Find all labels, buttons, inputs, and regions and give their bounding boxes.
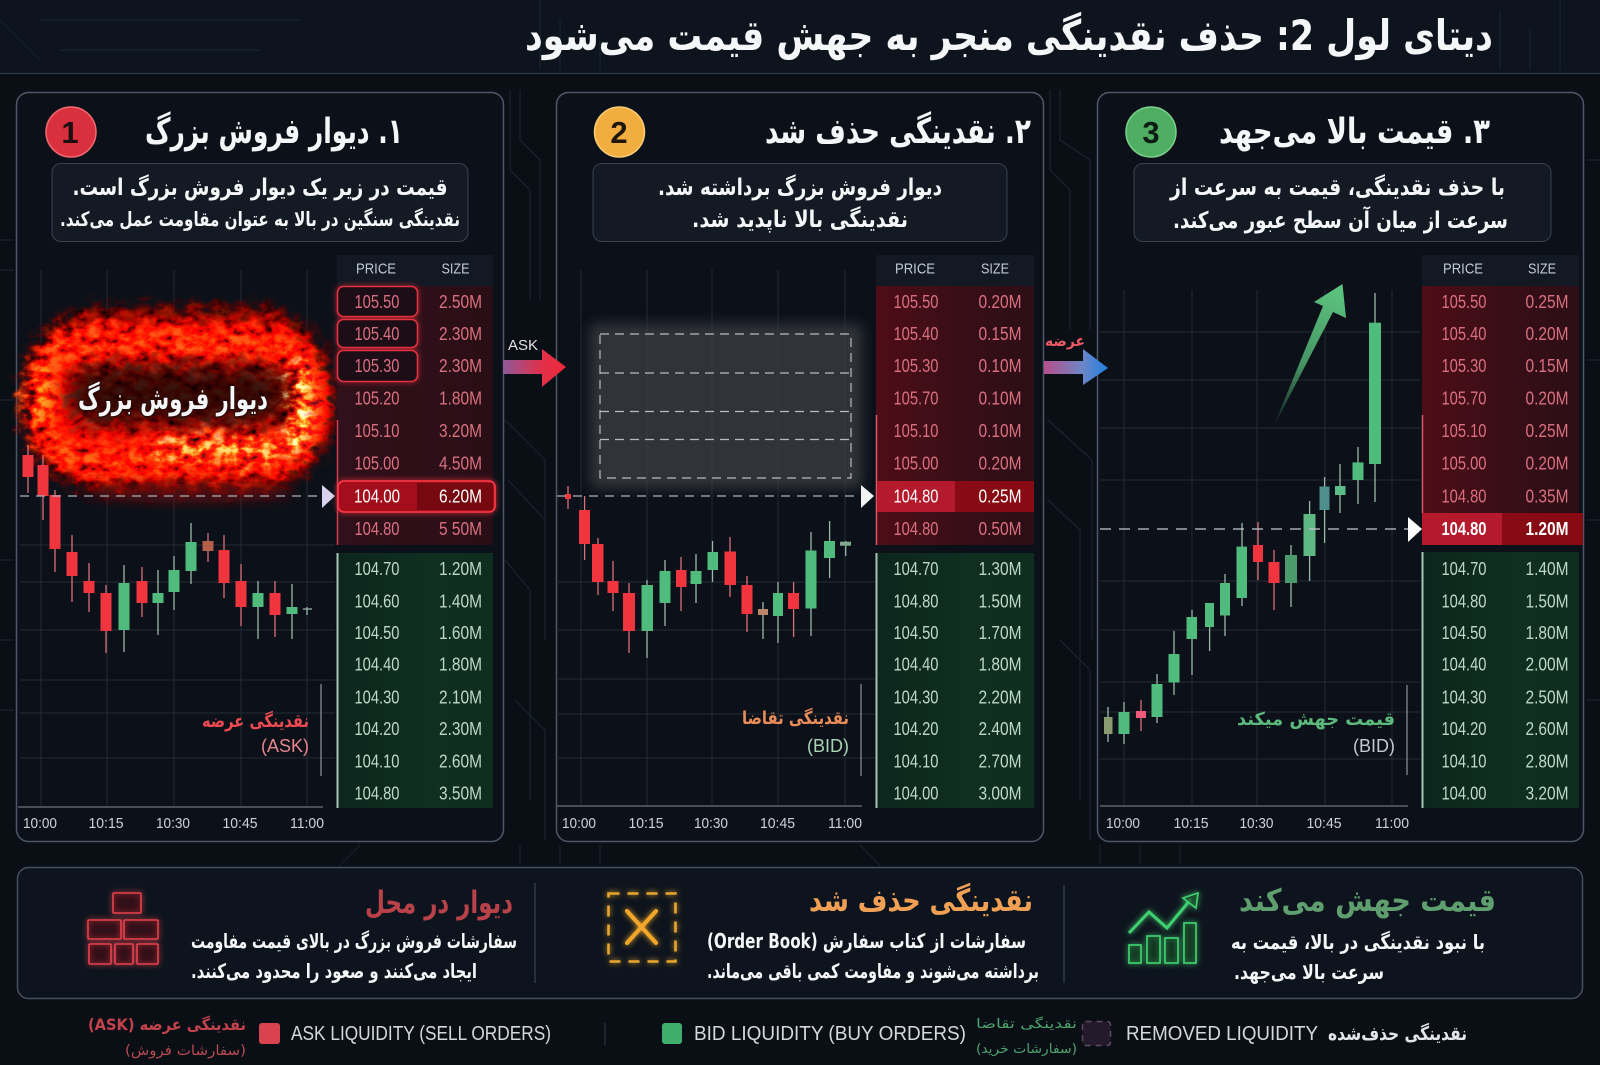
panel 1 heading: ۱. دیوار فروش بزرگ (145, 110, 403, 152)
panel 3 chart grid (1100, 290, 1420, 807)
panel 3 time axis: 10:00 (1106, 815, 1140, 832)
current price row (338, 481, 495, 512)
icon: red brick wall (88, 893, 158, 964)
summary 1: wall in place (88, 885, 517, 983)
panel 1 order book: 104.70 (354, 559, 400, 579)
panel 1 order book: 1.80M (439, 388, 482, 408)
panel 3 jump label: قیمت جهش میکند (1237, 709, 1395, 730)
step badge 1 (46, 107, 96, 157)
panel 3 order book: 104.20 (1442, 719, 1486, 739)
panel 2 order book: 104.80 (894, 592, 938, 612)
step badge 3 (1126, 107, 1176, 157)
panel 2 heading: ۲. نقدینگی حذف شد (765, 111, 1031, 152)
panel 1 order book: 105.30 (354, 356, 400, 376)
panel 2 current price line and marker (557, 485, 874, 508)
panel 1 order book: 5 50M (439, 519, 482, 539)
panel 1 order book: 104.60 (354, 592, 400, 612)
summary 2 body: سفارشات از کتاب سفارش (Order Book) (707, 929, 1026, 953)
summary 1 body: سفارشات فروش بزرگ در بالای قیمت مفاومت (191, 929, 517, 953)
panel 1 order book: 105.40 (354, 324, 400, 344)
panel 2 order book: 104.80 (894, 486, 938, 506)
panel 1 order book: 3.50M (439, 784, 482, 804)
panel 3 order book: 3.20M (1526, 784, 1568, 804)
panel 1: big sell wall (16, 92, 504, 842)
arrow: supply, panel 2 to panel 3 (1044, 332, 1108, 385)
panel 3 order book: 105.00 (1442, 454, 1486, 474)
panel 3 order book: 104.70 (1442, 559, 1486, 579)
panel 2 order book: 104.00 (894, 784, 938, 804)
panel 2 order book: 0.25M (978, 486, 1022, 506)
panel 1 order book: 2.60M (439, 752, 482, 772)
panel 3 order book: 0.25M (1526, 292, 1568, 312)
panel 1 current price line and marker (20, 485, 335, 508)
panel 2 time axis: 10:30 (694, 815, 728, 832)
panel 2 order book: 0.20M (978, 292, 1022, 312)
title: دیتای لول 2: حذف نقدینگی منجر به جهش قیمت می‌شود (525, 11, 1493, 61)
panel 2 order book: SIZE (981, 260, 1009, 278)
panel 1 order book: 1.20M (439, 559, 482, 579)
panel 3 order book (1422, 255, 1583, 808)
panel 1 order book: 104.30 (354, 688, 400, 708)
panel 3 description: با حذف نقدینگی، قیمت به سرعت از (1169, 174, 1505, 201)
summary 2 heading: نقدینگی حذف شد (809, 882, 1033, 919)
panel 3 order book: 105.50 (1442, 292, 1486, 312)
arrow: supply, panel 2 to panel 3: عرضه (1045, 332, 1085, 350)
panel 2 order book: 0.10M (978, 388, 1022, 408)
step badge 1: 1 (61, 115, 79, 150)
panel 2 description: دیوار فروش بزرگ برداشته شد. (658, 174, 942, 201)
panel 1 order book: 3.20M (439, 421, 482, 441)
panel 3 order book: 105.10 (1442, 421, 1486, 441)
summary 3 body: با نبود نقدینگی در بالا، قیمت به (1231, 930, 1485, 954)
current price row (877, 481, 1034, 512)
panel 3 order book: SIZE (1528, 260, 1556, 278)
panel 2 bid label: (BID) (807, 736, 849, 756)
panel 3 candlesticks (1104, 293, 1381, 744)
panel 2 order book: 3.00M (978, 784, 1022, 804)
panel 3 order book: PRICE (1443, 260, 1483, 278)
panel 3 order book: 104.80 (1442, 519, 1486, 539)
panel 2 order book: 1.70M (978, 623, 1022, 643)
panel 2 order book: PRICE (895, 260, 935, 278)
panel 2 time axis: 11:00 (828, 815, 862, 832)
icon: dashed box with X (608, 894, 676, 962)
panel 3 order book: 1.50M (1526, 592, 1568, 612)
panel 2 order book: 1.80M (978, 654, 1022, 674)
panel 3 order book: 104.80 (1442, 486, 1486, 506)
panel 3 order book: 105.30 (1442, 356, 1486, 376)
panel 3 order book: 1.80M (1526, 623, 1568, 643)
legend: removed: REMOVED LIQUIDITY (1126, 1023, 1318, 1045)
panel 1 order book: 105.00 (354, 454, 400, 474)
panel 3 order book: 1.20M (1526, 519, 1568, 539)
panel 3 order book: 104.30 (1442, 688, 1486, 708)
panel 1 order book: 2.10M (439, 688, 482, 708)
legend: bid: (سفارشات خرید) (976, 1042, 1077, 1057)
panel 3 time axis: 10:15 (1174, 815, 1208, 832)
panel 3 time axis: 10:30 (1240, 815, 1274, 832)
panel 1 order book: 104.20 (354, 719, 400, 739)
panel 1 order book: 104.50 (354, 623, 400, 643)
legend: ask: ASK LIQUIDITY (SELL ORDERS) (291, 1023, 551, 1045)
panel 2 order book: 0.10M (978, 356, 1022, 376)
panel 1 candlesticks (22, 445, 312, 653)
panel 1 order book: 1.60M (439, 623, 482, 643)
panel 1 time axis: 10:15 (88, 815, 124, 832)
panel 3 order book: 2.60M (1526, 719, 1568, 739)
panel 1 ask label (202, 684, 321, 776)
panel 2 order book: 0.10M (978, 421, 1022, 441)
panel 3 jump label: (BID) (1353, 736, 1395, 756)
panel 1 order book: 1.40M (439, 592, 482, 612)
panel 2 candlesticks (565, 486, 851, 658)
panel 3 order book: 0.20M (1526, 324, 1568, 344)
panel 2 order book: 105.30 (894, 356, 938, 376)
panel 3 description: سرعت از میان آن سطح عبور می‌کند. (1173, 205, 1508, 234)
summary 2 body (707, 929, 1039, 983)
panel 2 bid label: نقدینگی تقاضا (742, 707, 849, 729)
summary 1 heading: دیوار در محل (365, 885, 513, 921)
panel 2 order book: 105.00 (894, 454, 938, 474)
panel 1 order book: 4.50M (439, 454, 482, 474)
panel 1 order book: 6.20M (439, 486, 482, 506)
panel 1 order book: 104.40 (354, 654, 400, 674)
summary 3 body: سرعت بالا می‌جهد. (1234, 960, 1384, 984)
panel 2 order book: 104.30 (894, 688, 938, 708)
panel 2 order book: 104.40 (894, 654, 938, 674)
legend: removed: نقدینگی حذف‌شده (1328, 1022, 1467, 1045)
panel 2 order book: 0.50M (978, 519, 1022, 539)
panel 3: price jumps up (1098, 92, 1584, 842)
panel 2 order book: 105.10 (894, 421, 938, 441)
panel 1 ask label: نقدینگی عرضه (202, 710, 309, 732)
panel 3 order book: 0.35M (1526, 486, 1568, 506)
panel 1 order book: 104.80 (354, 784, 400, 804)
panel 1 order book: 2.30M (439, 719, 482, 739)
arrow: ask, panel 1 to panel 2: ASK (508, 337, 538, 354)
panel 3 order book: 0.20M (1526, 388, 1568, 408)
legend: ask: (سفارشات فروش) (125, 1043, 246, 1059)
panel 1 time axis: 11:00 (290, 815, 324, 832)
ask wall highlight boxes (338, 286, 418, 382)
fire wall (24, 308, 332, 503)
panel 2 order book: 104.20 (894, 719, 938, 739)
panel 2 order book: 2.20M (978, 688, 1022, 708)
panel 1 time axis: 10:45 (222, 815, 258, 832)
summary 1 body (191, 929, 517, 983)
panel 2 order book: 1.30M (978, 559, 1022, 579)
summary 3 heading: قیمت جهش می‌کند (1239, 883, 1496, 919)
panel 3 description (1134, 164, 1551, 242)
panel 1 order book: SIZE (442, 260, 470, 278)
summary 3: price jumps (1129, 883, 1496, 984)
arrow: ask, panel 1 to panel 2 (503, 337, 566, 387)
step badge 2: 2 (610, 115, 628, 150)
panel 3 upward arrow (1272, 284, 1346, 430)
panel 2 order book: 105.40 (894, 324, 938, 344)
panel 1 time axis: 10:30 (156, 815, 190, 832)
panel 3 order book: 2.00M (1526, 654, 1568, 674)
panel 2 order book: 2.70M (978, 752, 1022, 772)
panel 2 time axis: 10:45 (760, 815, 795, 832)
panel 3 order book: 104.50 (1442, 623, 1486, 643)
panel 2 time axis (557, 806, 862, 832)
step badge 3: 3 (1142, 115, 1160, 150)
panel 2 order book: 1.50M (978, 592, 1022, 612)
sparse embers below the wall (85, 481, 295, 503)
panel 2 bid label (742, 684, 861, 776)
panel 2 order book: 105.50 (894, 292, 938, 312)
panel 3 order book: 1.40M (1526, 559, 1568, 579)
summary 2 body: برداشته می‌شوند و مفاومت کمی باقی می‌ماند. (707, 959, 1039, 983)
panel 3 jump label (1237, 685, 1407, 775)
panel 2 order book: 104.50 (894, 623, 938, 643)
panel 3 order book: 2.50M (1526, 688, 1568, 708)
panel 2: liquidity removed (556, 92, 1044, 842)
legend: bid: نقدینگی تقاضا (976, 1016, 1077, 1032)
panel 2 time axis: 10:15 (628, 815, 664, 832)
legend: removed (1082, 1022, 1467, 1046)
header band (0, 0, 1600, 73)
summary panel (18, 868, 1582, 998)
panel 1 order book: 105.10 (354, 421, 400, 441)
panel 2 order book: 2.40M (978, 719, 1022, 739)
panel 3 order book: 104.40 (1442, 654, 1486, 674)
step badge 2 (594, 107, 644, 157)
legend: bid (662, 1016, 1077, 1057)
panel 2 chart grid (558, 270, 875, 807)
panel 1 chart grid (20, 270, 335, 807)
fire label: دیوار فروش بزرگ (78, 381, 268, 417)
panel 3 order book: 0.20M (1526, 454, 1568, 474)
panel 2 order book: 0.20M (978, 454, 1022, 474)
legend (88, 1015, 1467, 1059)
panel 2 order book: 104.80 (894, 519, 938, 539)
panel 3 heading: ۳. قیمت بالا می‌جهد (1219, 112, 1490, 152)
panel 3 time axis: 11:00 (1375, 815, 1409, 832)
panel 1 order book: 2.30M (439, 324, 482, 344)
summary 1 body: ایجاد می‌کنند و صعود را محدود می‌کنند. (191, 959, 477, 983)
icon: rising bars and arrow (1129, 893, 1198, 963)
panel 1 description: قیمت در زیر یک دیوار فروش بزرگ است. (72, 174, 448, 201)
panel 3 order book: 2.80M (1526, 752, 1568, 772)
panel 2 order book: 104.10 (894, 752, 938, 772)
panel 3 time axis: 10:45 (1306, 815, 1342, 832)
summary 3 body (1231, 930, 1485, 984)
panel 3 order book: 104.00 (1442, 784, 1486, 804)
panel 3 time axis (1100, 806, 1409, 832)
panel 2 order book: 105.70 (894, 388, 938, 408)
panel 2 description (593, 164, 1007, 242)
panel 3 order book: 105.40 (1442, 324, 1486, 344)
panel 1 order book: 1.80M (439, 654, 482, 674)
summary 2: liquidity removed (608, 882, 1039, 983)
panel 1 order book: PRICE (356, 260, 396, 278)
panel 3 current price line and marker (1100, 517, 1422, 542)
panel 1 order book: 105.50 (354, 292, 400, 312)
panel 1 order book: 105.20 (354, 388, 400, 408)
panel 2 description: نقدینگی بالا ناپدید شد. (692, 206, 908, 233)
removed liquidity ghost boxes (590, 324, 862, 488)
panel 1 order book: 2.50M (439, 292, 482, 312)
panel 2 order book: 104.70 (894, 559, 938, 579)
legend: bid: BID LIQUIDITY (BUY ORDERS) (694, 1023, 966, 1045)
panel 3 order book: 105.70 (1442, 388, 1486, 408)
panel 1 order book: 2.30M (439, 356, 482, 376)
panel 1 order book: 104.00 (354, 486, 400, 506)
panel 1 time axis (18, 807, 324, 832)
panel 1 time axis: 10:00 (23, 815, 57, 832)
panel 1 order book: 104.80 (354, 519, 400, 539)
panel 1 description (52, 164, 468, 242)
panel 3 order book: 0.15M (1526, 356, 1568, 376)
panel 1 order book: 104.10 (354, 752, 400, 772)
panel 3 order book: 104.10 (1442, 752, 1486, 772)
legend: ask: نقدینگی عرضه (ASK) (88, 1015, 246, 1034)
panel 1 ask label: (ASK) (261, 736, 309, 756)
panel 2 time axis: 10:00 (562, 815, 596, 832)
panel 2 order book: 0.15M (978, 324, 1022, 344)
panel 3 order book: 104.80 (1442, 592, 1486, 612)
panel 2 order book (876, 255, 1034, 808)
panel 1 description: نقدینگی سنگین در بالا به عتوان مقاومت عمل می‌کند. (60, 207, 460, 231)
panel 3 order book: 0.25M (1526, 421, 1568, 441)
current price row (1422, 513, 1583, 545)
panel 1 order book (337, 255, 495, 808)
legend: ask (88, 1015, 551, 1059)
